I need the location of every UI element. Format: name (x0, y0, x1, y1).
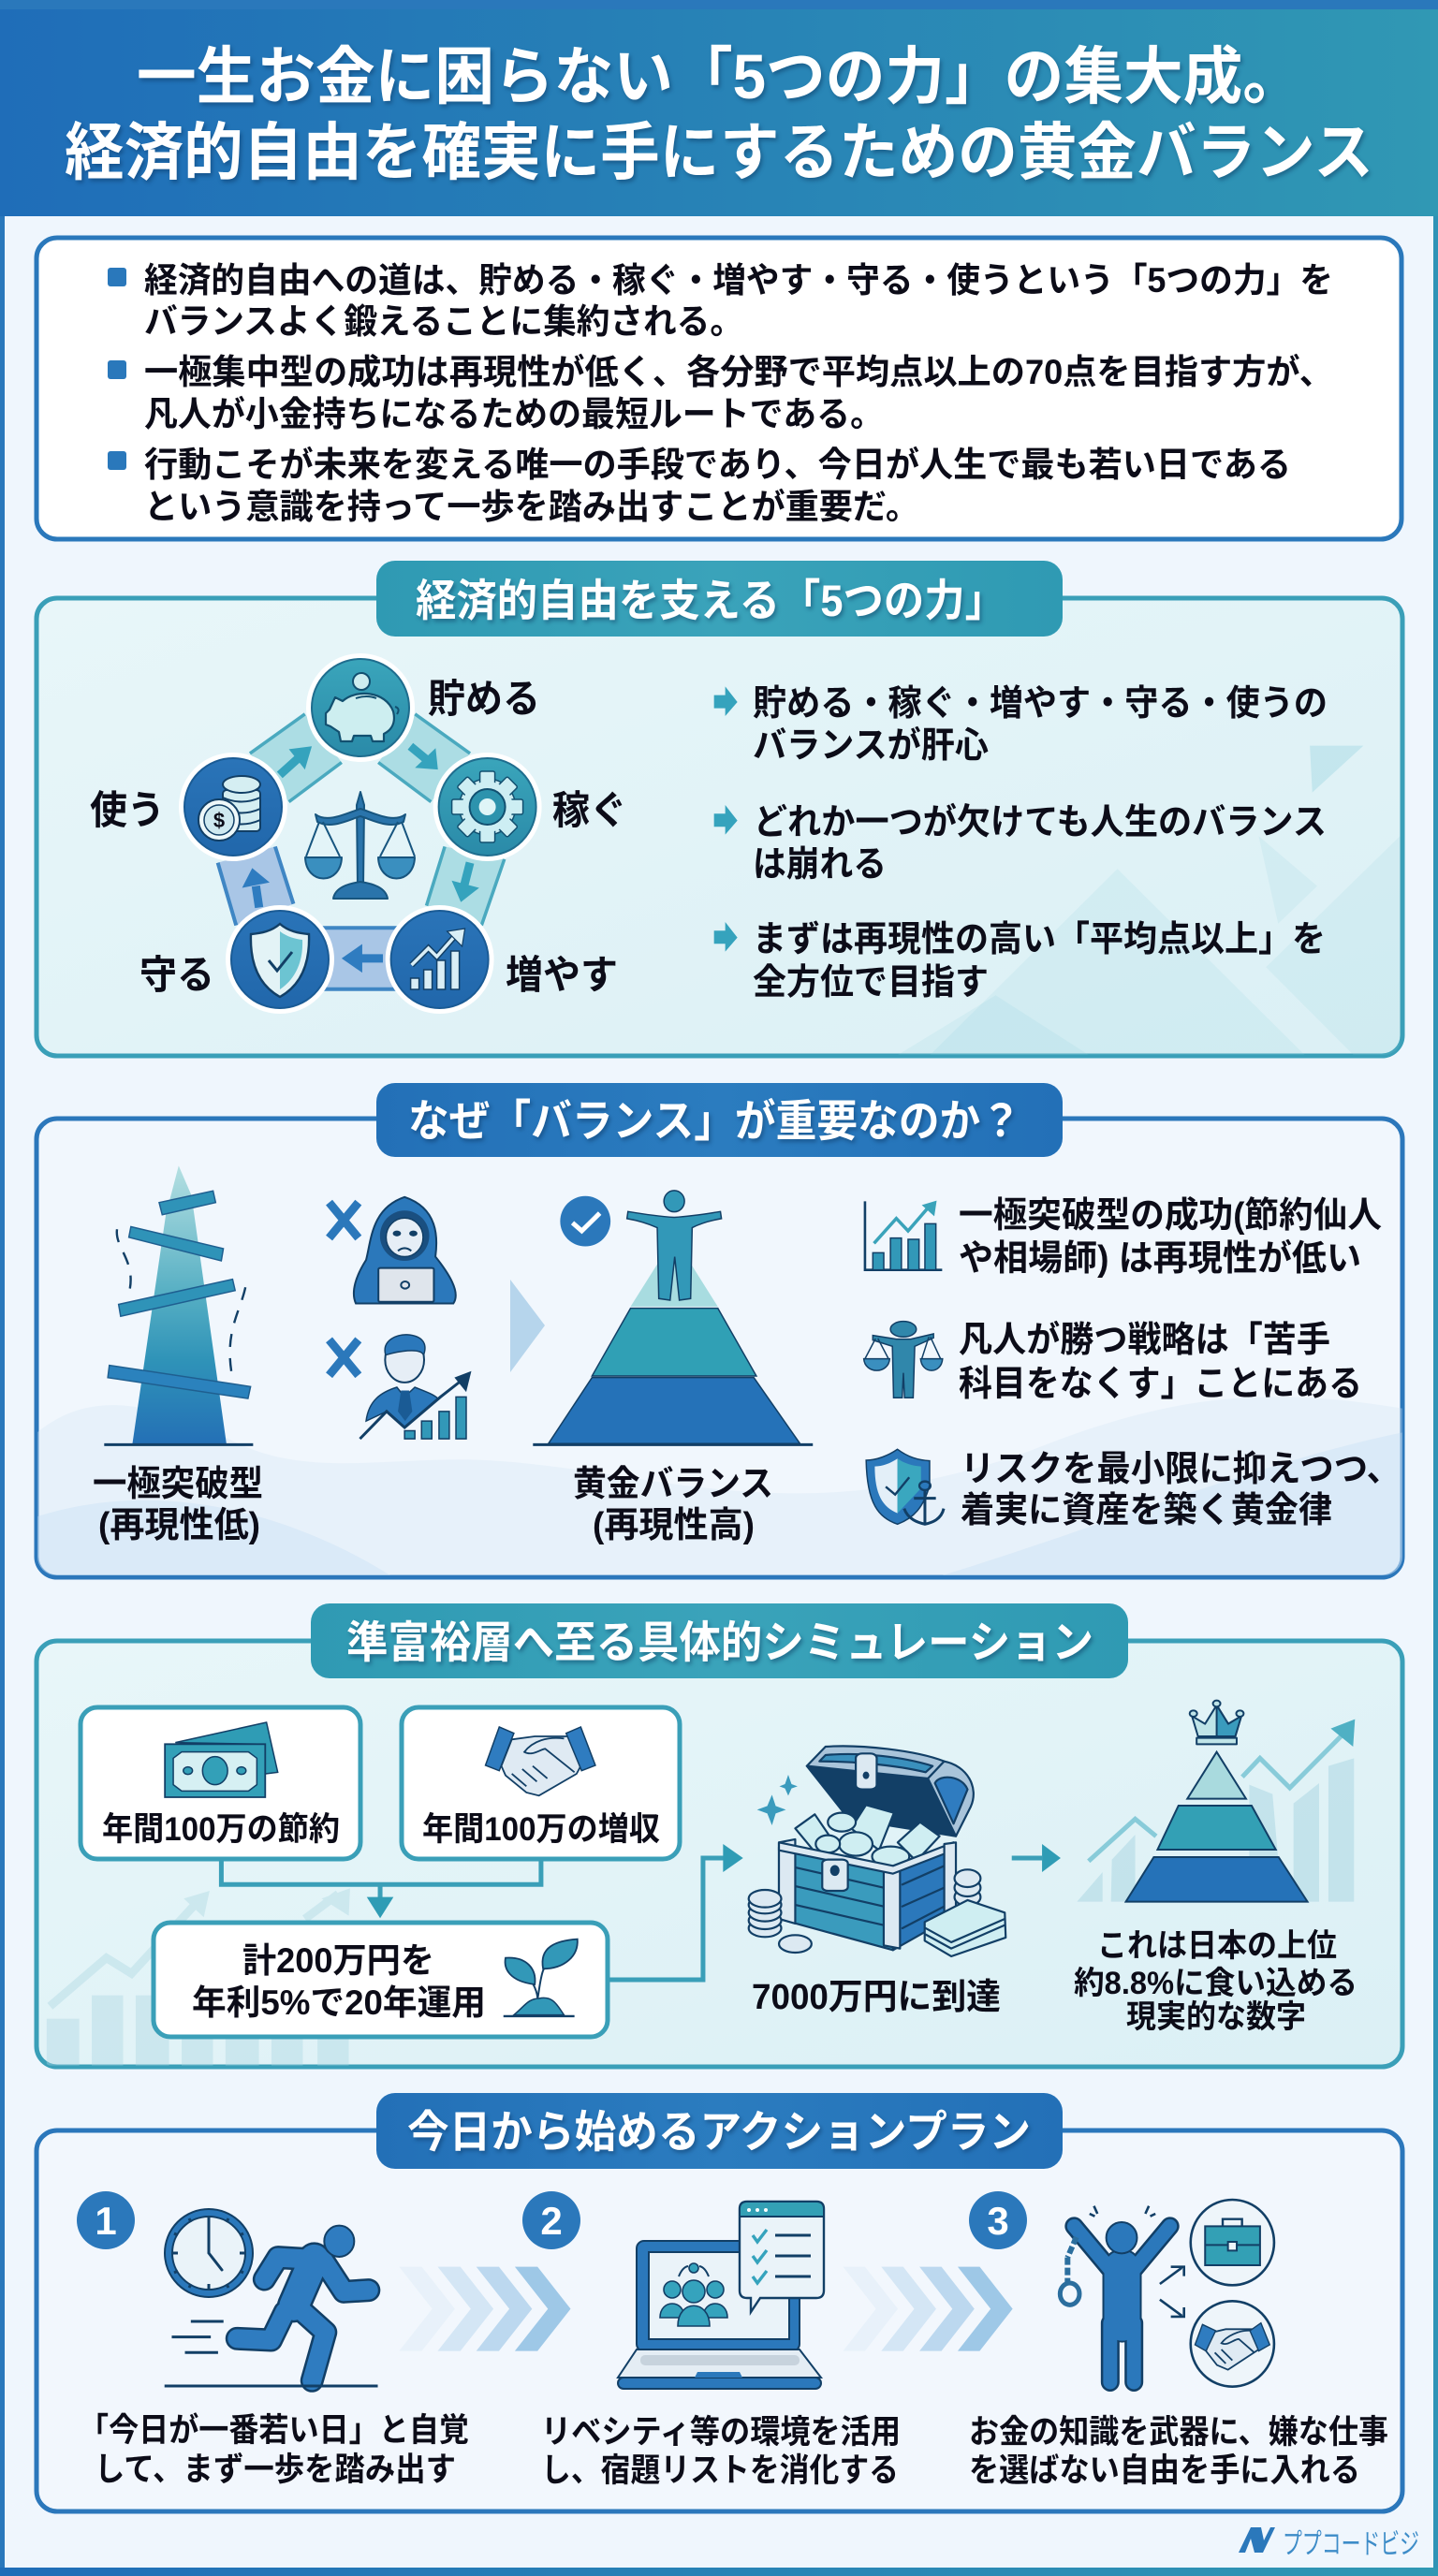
pentagon cycle diagram (90, 653, 627, 1014)
badge 3 (969, 2191, 1027, 2249)
text: five powers points: 貯める・稼ぐ・増やす・守る・使うの (753, 684, 1328, 724)
connectors between boxes (221, 1860, 541, 1918)
label: single peak type: (再現性低) (98, 1506, 260, 1545)
background chart left (47, 1888, 350, 2066)
panel: five powers (37, 561, 1402, 1058)
illustration: unstable tower (104, 1165, 253, 1444)
step 2 (522, 2191, 901, 2489)
label: 守る: 守る (139, 953, 214, 997)
box: savings: 年間100万の節約 (102, 1811, 340, 1848)
text: step 2: リベシティ等の環境を活用 (541, 2414, 901, 2451)
text: five powers points: まずは再現性の高い「平均点以上」を (753, 920, 1326, 959)
text: five powers points: 全方位で目指す (753, 963, 989, 1003)
icon: crown (1190, 1701, 1243, 1744)
summary bullet 2: 一極集中型の成功は再現性が低く、各分野で平均点以上の70点を目指す方が、 (144, 353, 1333, 391)
summary bullet 2 (108, 353, 1333, 433)
badge 2 (522, 2191, 580, 2249)
icon: handshake (486, 1727, 595, 1795)
text: why balance points (959, 1196, 1401, 1530)
illustration: golden balance pyramid (533, 1191, 813, 1444)
title banner: 一生お金に困らない「5つの力」の集大成。 (137, 42, 1302, 112)
panel: summary (37, 238, 1401, 539)
arrow: to treasure (609, 1844, 743, 1980)
icon: handshake option (1191, 2301, 1274, 2387)
label: 稼ぐ: 稼ぐ (552, 788, 627, 832)
title banner: 経済的自由を確実に手にするための黄金バランス (65, 118, 1373, 188)
panel: action plan (37, 2093, 1402, 2511)
icon: banknotes (165, 1722, 278, 1797)
illustration: top percent pyramid (1077, 1701, 1355, 1902)
badge 2: 2 (540, 2199, 563, 2243)
icon: coins (179, 753, 287, 861)
label: golden balance (573, 1465, 773, 1545)
text: five powers points: どれか一つが欠けても人生のバランス (754, 803, 1327, 842)
heading: simulation (311, 1603, 1128, 1678)
icon: shield (226, 905, 334, 1014)
label: 使う: 使う (90, 788, 165, 832)
icon: trader rejected (330, 1335, 471, 1439)
illustration: treasure chest (749, 1746, 1005, 1956)
label: golden balance: 黄金バランス (573, 1465, 773, 1504)
heading: action plan (376, 2093, 1063, 2169)
badge 1: 1 (95, 2199, 117, 2243)
icon: clock (165, 2209, 253, 2297)
box: income (402, 1707, 680, 1859)
text: step 3: お金の知識を武器に、嫌な仕事 (969, 2414, 1388, 2451)
icon: gear (433, 753, 542, 861)
icon: balanced person (864, 1322, 943, 1398)
text: step 3 (969, 2414, 1388, 2489)
heading: simulation: 準富裕層へ至る具体的シミュレーション (346, 1617, 1093, 1667)
box: invest 2M: 年利5%で20年運用 (192, 1983, 486, 2022)
heading: five powers (376, 561, 1063, 637)
summary bullet 3: という意識を持って一歩を踏み出すことが重要だ。 (144, 488, 919, 526)
icon: sprout (504, 1939, 578, 2016)
title banner (0, 0, 1438, 216)
summary bullet 1: 経済的自由への道は、貯める・稼ぐ・増やす・守る・使うという「5つの力」を (144, 261, 1333, 300)
icon: small chart (865, 1201, 942, 1270)
heading: five powers: 経済的自由を支える「5つの力」 (416, 576, 1005, 625)
arrow: step 1 to 2 (399, 2267, 571, 2351)
heading: why balance (376, 1083, 1063, 1157)
heading: why balance: なぜ「バランス」が重要なのか？ (408, 1096, 1021, 1146)
text: step 2: し、宿題リストを消化する (541, 2452, 899, 2489)
step 3 (969, 2191, 1388, 2489)
icon: laptop with checklist (618, 2202, 824, 2389)
center scale icon (305, 792, 415, 899)
arrow: step 2 to 3 (843, 2267, 1013, 2351)
icon: running person (165, 2226, 378, 2386)
footer bar (0, 2568, 1438, 2576)
arrow: to pyramid (1012, 1844, 1061, 1872)
label: 増やす: 増やす (506, 953, 618, 997)
text: top 8.8 percent: 約8.8%に食い込める (1074, 1966, 1357, 2001)
label: 70 million: 7000万円に到達 (752, 1978, 1001, 2017)
badge 1 (77, 2191, 135, 2249)
label: golden balance: (再現性高) (593, 1506, 755, 1545)
summary bullet 1 (108, 261, 1333, 341)
icon: growth chart (386, 905, 494, 1014)
text: why balance points: 凡人が勝つ戦略は「苦手 (959, 1321, 1330, 1360)
box: savings (81, 1707, 360, 1859)
icon: piggy bank (306, 653, 415, 762)
text: why balance points: 着実に資産を築く黄金律 (961, 1491, 1332, 1530)
cycle bands and arrows (218, 714, 505, 990)
text: why balance points: リスクを最小限に抑えつつ、 (961, 1450, 1401, 1489)
badge 3: 3 (987, 2199, 1009, 2243)
text: five powers points: バランスが肝心 (753, 726, 989, 766)
text: five powers points (714, 684, 1328, 1003)
arrow: to golden balance (510, 1280, 545, 1372)
text: why balance points: 科目をなくす」ことにある (959, 1365, 1362, 1404)
panel: simulation (37, 1603, 1402, 2067)
summary bullet 2: 凡人が小金持ちになるための最短ルートである。 (144, 395, 884, 433)
label: 貯める: 貯める (428, 677, 540, 721)
text: step 1: して、まず一歩を踏み出す (95, 2452, 456, 2488)
step 1 (77, 2191, 469, 2488)
text: step 1: 「今日が一番若い日」と自覚 (79, 2412, 469, 2449)
summary bullet 3: 行動こそが未来を変える唯一の手段であり、今日が人生で最も若い日である (144, 446, 1291, 484)
text: why balance points: や相場師) は再現性が低い (959, 1239, 1361, 1279)
text: step 2 (541, 2414, 901, 2489)
icon: hacker rejected (330, 1197, 456, 1303)
label: single peak type: 一極突破型 (93, 1465, 263, 1504)
text: step 3: を選ばない自由を手に入れる (969, 2452, 1360, 2489)
icon: freed person (1060, 2200, 1274, 2387)
text: top 8.8 percent: これは日本の上位 (1097, 1928, 1337, 1964)
icon: briefcase option (1191, 2200, 1274, 2285)
summary bullet 3 (108, 446, 1291, 526)
text: why balance points: 一極突破型の成功(節約仙人 (959, 1196, 1382, 1236)
box: income: 年間100万の増収 (422, 1811, 660, 1848)
text: top 8.8 percent (1074, 1928, 1357, 2035)
label: single peak type (93, 1465, 263, 1545)
text: five powers points: は崩れる (753, 845, 887, 885)
panel: why balance (37, 1083, 1404, 1577)
heading: action plan: 今日から始めるアクションプラン (407, 2107, 1031, 2157)
text: top 8.8 percent: 現実的な数字 (1126, 1999, 1306, 2035)
text: step 1 (79, 2412, 469, 2488)
box: invest 2M: 計200万円を (242, 1941, 434, 1980)
summary bullet 1: バランスよく鍛えることに集約される。 (144, 302, 743, 341)
icon: coins: $ (213, 809, 225, 832)
box: invest 2M (154, 1923, 608, 2037)
logo (1239, 2527, 1419, 2560)
icon: shield with anchor (866, 1449, 944, 1524)
